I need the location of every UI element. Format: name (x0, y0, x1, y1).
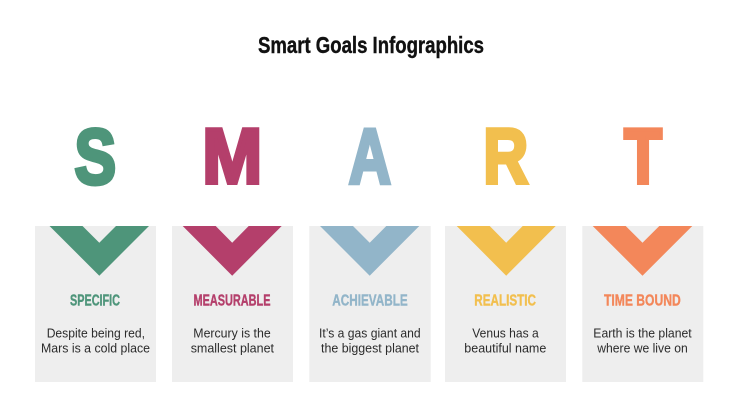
text block: Mars is a cold place (41, 341, 150, 356)
text block (464, 326, 546, 356)
heading: time bound: TIME BOUND (604, 292, 681, 310)
text block (593, 326, 692, 356)
card background (309, 226, 431, 382)
letter R: R (483, 112, 528, 200)
text block: Mercury is the (193, 326, 271, 341)
text block: Venus has a (472, 326, 539, 341)
text block: beautiful name (464, 341, 546, 356)
text block: smallest planet (191, 341, 274, 356)
text block: the biggest planet (321, 341, 419, 356)
text block: Earth is the planet (593, 326, 692, 341)
letter A: A (349, 112, 391, 200)
panel: time bound (582, 112, 703, 382)
icon: chevron (183, 226, 282, 276)
card background (582, 226, 703, 382)
heading: measurable: MEASURABLE (194, 292, 271, 310)
icon: chevron (50, 226, 149, 276)
heading: specific: SPECIFIC (70, 292, 120, 310)
icon: chevron (593, 226, 692, 276)
text block: where we live on (596, 341, 688, 356)
icon: chevron (320, 226, 419, 276)
panel: measurable (172, 112, 293, 382)
heading: achievable: ACHIEVABLE (332, 292, 408, 310)
letter T: T (624, 112, 662, 200)
text block: Despite being red, (47, 326, 145, 341)
text block: It’s a gas giant and (319, 326, 421, 341)
letter M: M (202, 112, 262, 200)
panel: realistic (445, 112, 566, 382)
text block (41, 326, 150, 356)
text block (191, 326, 274, 356)
text block (319, 326, 421, 356)
card background (172, 226, 293, 382)
card background (35, 226, 156, 382)
heading: realistic: REALISTIC (474, 292, 536, 310)
panel: specific (35, 112, 156, 382)
title: Smart Goals Infographics (258, 32, 484, 58)
icon: chevron (457, 226, 556, 276)
card background (445, 226, 566, 382)
panel: achievable (309, 112, 431, 382)
letter S: S (74, 112, 116, 200)
